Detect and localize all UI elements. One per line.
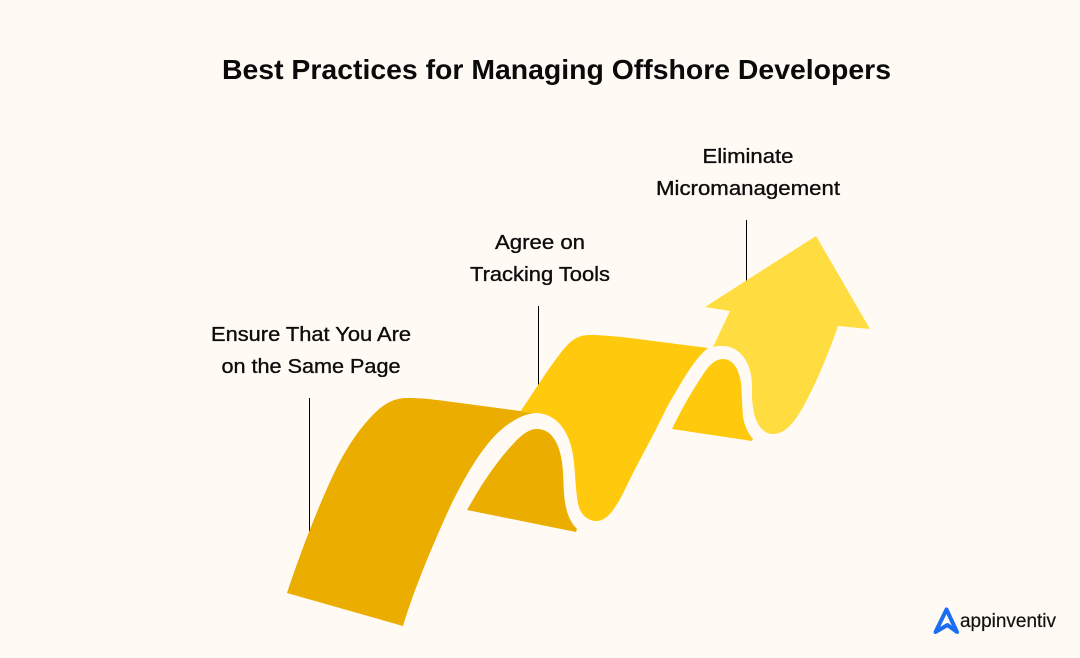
label: step 3 <box>656 146 840 200</box>
icon: logo mark <box>936 610 957 632</box>
label: step 1 <box>211 324 411 378</box>
label: step 2: Agree on <box>495 232 585 254</box>
ribbon: step 1 main <box>287 398 537 626</box>
logo: appinventiv <box>936 610 1056 632</box>
connector: step 1 <box>308 398 310 532</box>
label: step 3: Micromanagement <box>656 178 840 200</box>
connector: step 3 <box>746 220 748 281</box>
label: step 2 <box>470 232 610 286</box>
arrow head segment <box>705 236 870 434</box>
label: step 2: Tracking Tools <box>470 264 610 286</box>
title: Best Practices for Managing Offshore Developers <box>222 54 891 85</box>
ribbon: step 2 main <box>520 335 708 521</box>
logo wordmark: appinventiv <box>960 611 1056 632</box>
label: step 1: Ensure That You Are <box>211 324 411 346</box>
label: step 1: on the Same Page <box>222 356 400 378</box>
label: step 3: Eliminate <box>702 146 794 168</box>
ribbon: step 2 fold <box>672 359 753 441</box>
connector: step 2 <box>538 306 540 386</box>
ribbon: step 1 fold <box>467 429 577 532</box>
